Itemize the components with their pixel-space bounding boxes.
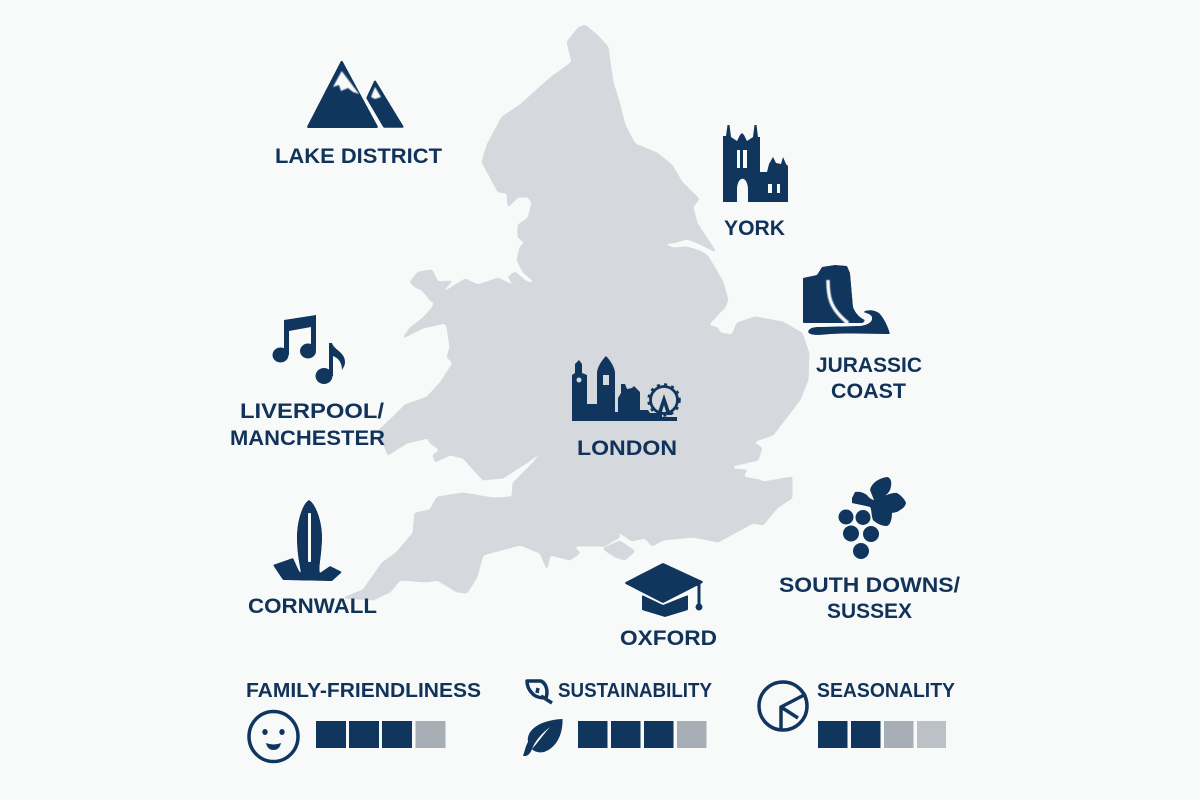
icon: surfboard (Cornwall)	[273, 500, 342, 581]
label: Jurassic Coast: JURASSIC	[816, 354, 922, 377]
label: South Downs/Sussex: SOUTH DOWNS/	[779, 574, 960, 597]
rating bar: 3 of 4	[578, 721, 706, 748]
icon: seasonal dial	[759, 682, 807, 731]
icon: music notes (Liverpool/Manchester)	[272, 315, 345, 384]
label: Jurassic Coast	[816, 354, 922, 403]
icon: graduation cap (Oxford)	[626, 564, 702, 617]
rating bar: 2 of 4	[818, 721, 946, 748]
label: Oxford: OXFORD	[620, 627, 717, 650]
label: Cornwall: CORNWALL	[248, 595, 377, 618]
rating bar: 3 of 4	[316, 721, 446, 748]
label: Lake District: LAKE DISTRICT	[275, 145, 442, 168]
legend: sustainability	[523, 679, 712, 756]
legend: seasonality	[759, 679, 955, 748]
label: Liverpool/Manchester	[230, 400, 385, 450]
label: London: LONDON	[577, 437, 677, 460]
icon: solid leaf	[523, 719, 563, 756]
map of England and Wales	[343, 25, 809, 600]
icon: small outlined leaf	[527, 681, 552, 703]
legend: family-friendliness	[246, 679, 481, 762]
label: Liverpool/Manchester: LIVERPOOL/	[240, 400, 384, 423]
label: South Downs/Sussex: SUSSEX	[827, 600, 912, 623]
icon: grapes (South Downs/Sussex)	[838, 477, 906, 559]
label: York: YORK	[724, 217, 785, 240]
label: South Downs/Sussex	[779, 574, 960, 623]
icon: cliff and shore (Jurassic Coast)	[803, 265, 890, 335]
legend heading: family-friendliness: FAMILY-FRIENDLINESS	[246, 679, 481, 702]
icon: mountains (Lake District)	[308, 62, 403, 127]
icon: skyline (London)	[572, 356, 680, 421]
label: Liverpool/Manchester: MANCHESTER	[230, 427, 385, 450]
icon: smiley face	[249, 712, 298, 762]
icon: cathedral (York)	[723, 125, 788, 202]
legend heading: sustainability: SUSTAINABILITY	[558, 679, 712, 702]
legend heading: seasonality: SEASONALITY	[817, 679, 955, 702]
label: Jurassic Coast: COAST	[831, 380, 906, 403]
